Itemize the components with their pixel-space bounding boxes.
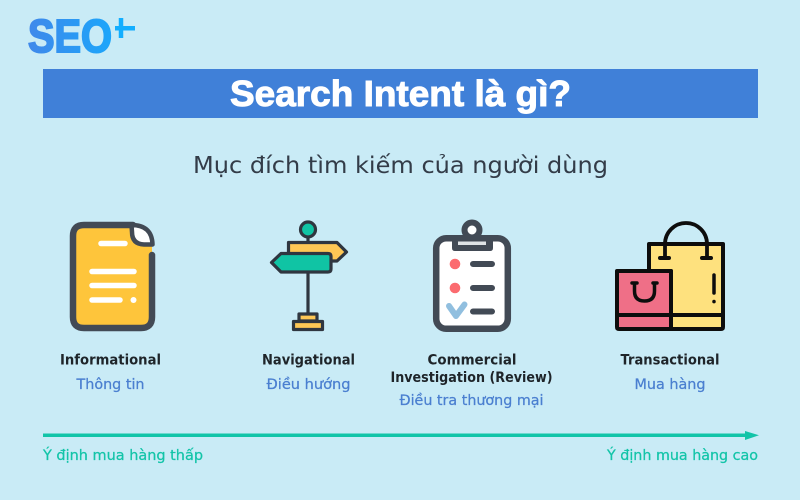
label: Commercial Investigation	[390, 352, 552, 409]
icon: shopping bags	[617, 223, 723, 329]
label: Informational	[60, 352, 161, 393]
label: Commercial Investigation: Investigation (Review)	[390, 370, 552, 386]
subtitle: Mục đích tìm kiếm của người dùng	[193, 151, 608, 179]
title banner: Search Intent là gì?	[230, 73, 571, 114]
icon: document	[73, 225, 152, 328]
title banner	[43, 69, 758, 118]
icon: signpost	[272, 222, 346, 330]
icon: clipboard checklist	[436, 222, 508, 329]
label: Navigational: Điều hướng	[266, 376, 350, 393]
label: Transactional: Transactional	[620, 352, 720, 368]
label: Informational: Thông tin	[76, 377, 144, 393]
label: Navigational	[262, 352, 355, 393]
logo: SEO+: SEO	[28, 10, 112, 62]
label: Navigational: Navigational	[262, 352, 355, 368]
label: Commercial Investigation: Điều tra thương mại	[400, 392, 544, 409]
label: low purchase intent: Ý định mua hàng thấp	[42, 447, 203, 464]
label: high purchase intent: Ý định mua hàng cao	[606, 447, 758, 464]
label: Transactional	[620, 352, 720, 393]
label: Informational: Informational	[60, 352, 161, 368]
label: Commercial Investigation: Commercial	[428, 352, 516, 368]
label: Transactional: Mua hàng	[634, 377, 706, 393]
arrow: purchase intent scale	[43, 431, 759, 440]
